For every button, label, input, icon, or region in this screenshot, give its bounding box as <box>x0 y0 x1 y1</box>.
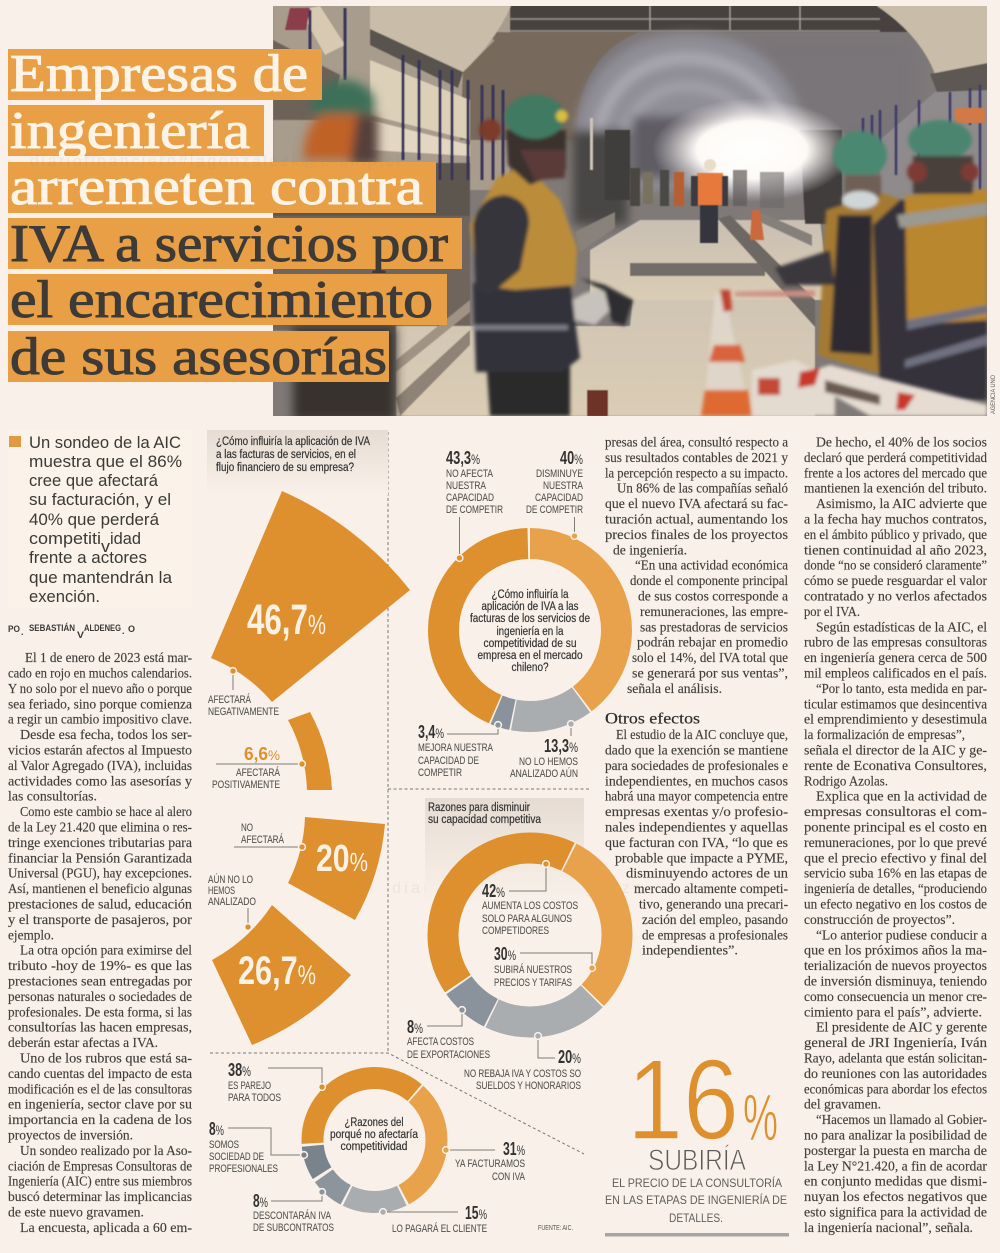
label: 31%: CON IVA <box>492 1171 525 1183</box>
article text column 4: un efecto negativo en los costos de <box>804 896 987 912</box>
article text column 4: el emprendimiento y desestimula <box>804 712 987 727</box>
article text column 1: cando cuentas del impacto de esta <box>8 1066 192 1081</box>
donut centre question <box>470 589 590 674</box>
article text column 1: buscó determinar las implicancias <box>8 1189 192 1204</box>
article text column 1: cado en rojo en muchos calendarios. <box>8 666 192 680</box>
dashed dividers <box>210 432 590 1154</box>
article text column 1: profesionales. De esta forma, si las <box>8 1004 192 1019</box>
article text column 4: rente de Econativa Consultores, <box>804 758 987 773</box>
article text column 4: “Lo anterior pudiese conducir a <box>816 927 987 942</box>
summary callout: su facturación, y el <box>29 490 171 509</box>
label: 20%: 20% <box>558 1047 581 1067</box>
article text column 4: como consecuencia un menor cre- <box>804 989 987 1004</box>
article text column 4: que en los próximos años la ma- <box>804 943 987 958</box>
label: 40%: 40% <box>560 448 583 468</box>
article text column 1: personas naturales o sociedades de <box>8 989 192 1004</box>
article text column 4: rubro de las empresas consultoras <box>804 635 987 650</box>
article text column 4: cómo se puede resguardar el valor <box>804 573 988 588</box>
label: 8% subcontratos <box>253 1189 334 1234</box>
panel: reasons to reduce competitiveness donut <box>407 798 651 1092</box>
article text column 3: independientes, en muchos casos <box>605 773 788 788</box>
sector: 26,7%: ANALIZADO <box>208 896 256 908</box>
label: 40%: NUESTRA <box>543 480 584 492</box>
label: 38%: 38% <box>228 1060 251 1080</box>
byline: PO <box>8 624 20 634</box>
article text column 4: construcción de proyectos”. <box>804 912 955 927</box>
article text column 3: podrán rebajar en promedio <box>637 635 788 650</box>
article text column 4: la formalización de empresas”, <box>804 727 965 742</box>
label: 15%: LO PAGARÁ EL CLIENTE <box>392 1222 487 1235</box>
label: 42%: AUMENTA LOS COSTOS <box>482 900 578 912</box>
donut centre question: ¿Razones del <box>344 1117 404 1129</box>
watermarks: diariofinanciero#lagonzalezk@e-chip.cl <box>30 153 400 170</box>
title line 5: el encarecimiento <box>10 271 433 329</box>
byline: V <box>77 630 84 640</box>
chart heading box <box>425 798 584 903</box>
label: 20%: SUELDOS Y HONORARIOS <box>476 1080 581 1092</box>
article text column 1: La encuesta, aplicada a 60 em- <box>20 1220 192 1235</box>
article text column 3: disminuyendo actores de un <box>626 866 788 881</box>
label: 43,3%: 43,3% <box>446 448 480 468</box>
article text column 1: ciación de Empresas Consultoras de <box>8 1158 192 1173</box>
article text column 4: remuneraciones, por lo que prevé <box>804 835 987 850</box>
panel: reasons for no effect donut <box>209 1060 573 1235</box>
article text column 4: terialización de nuevos proyectos <box>804 958 987 973</box>
byline: SEBASTIÁN <box>29 623 75 633</box>
article text column 4: de inversión disminuya, teniendo <box>804 974 987 988</box>
summary callout: exención. <box>29 587 100 606</box>
article text column 4: ponente principal es el costo en <box>804 820 987 834</box>
article text column 3: independientes”. <box>642 943 738 958</box>
donut centre question: ¿Cómo influiría la <box>492 589 569 601</box>
label: 8% subcontratos: 8% <box>253 1191 268 1211</box>
sector: 20%: NO <box>241 822 253 834</box>
article text column 4: frente a los actores del mercado que <box>804 465 987 480</box>
label: 13,3%: 13,3% <box>544 736 578 756</box>
article text column 3: de ingeniería. <box>613 542 687 557</box>
label: 8% <box>407 1007 490 1061</box>
sector: 26,7%: HEMOS <box>208 885 235 897</box>
label: 15%: 15% <box>465 1203 487 1223</box>
label: 3,4%: 3,4% <box>418 722 444 742</box>
label: 15% <box>380 1203 487 1235</box>
panel: competitiveness donut <box>418 448 616 780</box>
article text column 3: se generará por sus ventas”, <box>632 666 788 680</box>
article text column 3: probable que impacte a PYME, <box>615 850 788 865</box>
summary callout: frente a actores <box>29 548 147 567</box>
article text column 1: de este nuevo gravamen. <box>8 1204 144 1220</box>
article text column 3: tivo, generando una precari- <box>639 896 788 912</box>
summary callout: v <box>101 537 111 556</box>
article text column 3: mercado altamente competi- <box>634 881 788 896</box>
label: 13,3%: ANALIZADO AÚN <box>510 767 578 780</box>
article text column 4: a la fecha hay muchos contratos, <box>804 512 987 526</box>
article text column 1: ejemplo. <box>8 927 54 942</box>
article text column 3: sas prestadoras de servicios <box>640 619 788 634</box>
label: 30%: 30% <box>494 944 516 964</box>
label: 30%: PRECIOS Y TARIFAS <box>494 977 572 989</box>
byline: ALDENEG <box>84 623 121 633</box>
article text column 3: que facturan con IVA, “lo que es <box>605 835 788 850</box>
sector: 20%: AFECTARÁ <box>241 833 284 846</box>
subheading: Otros efectos: Otros efectos <box>605 711 700 728</box>
article text column 4: en conjunto medidas que dismi- <box>804 1174 987 1189</box>
title line 6: de sus asesorías <box>10 328 387 386</box>
label: 3,4%: MEJORA NUESTRA <box>418 742 493 754</box>
article text column 4: mantienen la exención del tributo. <box>804 481 987 496</box>
article text column 1: consultorías las hacen empresas, <box>8 1020 192 1035</box>
article text column 4: donde “no se consideró claramente” <box>804 558 987 573</box>
label: 42%: 42% <box>482 881 505 901</box>
chart heading box: su capacidad competitiva <box>428 814 542 826</box>
cones and barrier tape <box>701 290 987 416</box>
article text column 1: Y no solo por el nuevo año o porque <box>8 681 192 696</box>
label: 38% <box>228 1060 325 1104</box>
sector: 6,6%: 6,6% <box>244 744 280 764</box>
article text column 4: tienen continuidad al año 2023, <box>804 542 987 557</box>
watermarks: diariofinanciero#lagonza <box>392 880 642 897</box>
label: 40%: CAPACIDAD <box>535 492 583 504</box>
label: 40%: DISMINUYE <box>536 468 583 480</box>
chart heading box: a las facturas de servicios, en el <box>216 449 356 461</box>
title line 4: IVA a servicios por <box>10 215 448 273</box>
article text column 1: prestaciones de salud, educación <box>8 896 192 912</box>
credit: photo agency: AGENCIA UNO <box>990 375 997 414</box>
article text column 1: actividades como las asesorías y <box>8 773 192 788</box>
article text column 1: vicios estarán afectos al Impuesto <box>8 742 192 758</box>
right workers <box>775 120 987 400</box>
panel: financial flow radial chart <box>207 430 410 1045</box>
article text column 4: do reuniones con las autoridades <box>804 1066 987 1081</box>
callout description: DETALLES. <box>669 1211 723 1225</box>
article text column 3: El estudio de la AIC concluye que, <box>616 727 788 742</box>
article text column 4: Rodrigo Azolas. <box>804 773 888 788</box>
article text column 1: modificación es el de las consultoras <box>8 1081 192 1096</box>
callout: 16%: % <box>743 1080 778 1154</box>
article text column 3: habrá una mayor competencia entre <box>605 789 788 804</box>
donut segments <box>409 814 651 1056</box>
watermarks <box>30 153 642 897</box>
article text column 3: solo el 14%, del IVA total que <box>632 650 788 665</box>
article text column 1: importancia en la cadena de los <box>8 1112 192 1127</box>
article text column 3: Un 86% de las compañías señaló <box>617 481 788 496</box>
article text column 4: “Por lo tanto, esta medida en par- <box>816 681 987 696</box>
article text column 4 <box>804 434 988 1235</box>
label: 13,3% <box>510 721 578 780</box>
label: 42%: SOLO PARA ALGUNOS <box>482 913 572 925</box>
article text column 3: nales independientes y aquellas <box>605 820 788 834</box>
article text column 4: nuyan los efectos negativos que <box>804 1189 987 1204</box>
article text column 4: la ingeniería nacional”, señala. <box>804 1220 973 1235</box>
article text column 3: remuneraciones, las empre- <box>640 604 788 619</box>
label: 31% <box>443 1139 525 1183</box>
article text column 4: Explica que en la actividad de <box>816 789 987 804</box>
article text column 3: turación actual, aumentando los <box>605 512 788 526</box>
chart heading box <box>207 430 388 495</box>
label: 42% <box>482 861 578 937</box>
article text column 1: las consultorías. <box>8 789 97 804</box>
article text column 1: El 1 de enero de 2023 está mar- <box>25 650 192 665</box>
article text column 1: Como este cambio se hace al alero <box>20 804 192 819</box>
article text column 1: de la Ley 21.420 que elimina o res- <box>8 820 192 834</box>
article text column 3: señala el análisis. <box>627 681 722 696</box>
article text column 1: Un sondeo realizado por la Aso- <box>20 1143 192 1158</box>
byline: . <box>122 626 125 636</box>
byline: O <box>128 624 135 634</box>
sector: 6,6%: AFECTARÁ <box>236 766 281 779</box>
article text column 3: de sus costos corresponde a <box>638 588 788 604</box>
article text column 1: La otra opción para eximirse del <box>20 943 192 958</box>
article text column 4: general de JRI Ingeniería, Iván <box>804 1035 987 1050</box>
article text column 1: al Valor Agregado (IVA), incluidas <box>8 758 192 773</box>
article text column 1: Así, mantienen el beneficio algunas <box>8 881 192 896</box>
article text column 1: a regir un cambio impositivo clave. <box>8 712 192 727</box>
label: 40% <box>526 448 584 539</box>
article text column 3: zación del empleo, pasando <box>642 912 788 927</box>
summary callout: Un sondeo de la AIC <box>29 433 181 452</box>
label: 8% sociedad: SOCIEDAD DE <box>209 1151 264 1163</box>
label: 30%: SUBIRÁ NUESTROS <box>494 963 572 976</box>
sector: 20% <box>234 817 385 920</box>
center worker <box>470 95 633 416</box>
sector: 26,7%: 26,7% <box>238 949 316 993</box>
byline <box>8 623 135 640</box>
label: 20% <box>464 1033 581 1092</box>
title line 2: ingeniería <box>10 102 250 160</box>
label: 38%: ES PAREJO <box>228 1080 271 1092</box>
sector: 20%: 20% <box>316 838 368 880</box>
label: 31%: YA FACTURAMOS <box>455 1158 525 1170</box>
label: 43,3%: NO AFECTA <box>446 468 494 480</box>
donut centre question: competitividad de su <box>484 638 576 650</box>
article text column 4: la Ley N°21.420, a fin de acordar <box>804 1158 988 1173</box>
article text column 1: Uno de los rubros que está sa- <box>20 1050 192 1066</box>
label: 3,4% <box>418 722 501 779</box>
label: 8% sociedad: 8% <box>209 1119 224 1139</box>
label: 42%: COMPETIDORES <box>482 925 549 937</box>
donut centre question: porqué no afectaría <box>330 1129 419 1141</box>
title line 1: Empresas de <box>10 45 308 103</box>
article text column 1: tringe exenciones tributarias para <box>8 835 192 850</box>
article text column 4: en ingeniería genera cerca de 500 <box>804 650 987 665</box>
article text column 4: postergar la puesta en marcha de <box>804 1143 987 1158</box>
donut centre question: chileno? <box>512 662 548 674</box>
donut segments <box>309 1075 440 1205</box>
article text column 4: De hecho, el 40% de los socios <box>816 434 987 450</box>
summary callout: competiti <box>29 529 101 548</box>
sector: 6,6%: POSITIVAMENTE <box>212 779 280 791</box>
summary callout: 40% que perderá <box>29 510 160 529</box>
article text column 1: tributo -hoy de 19%- es que las <box>8 958 192 973</box>
callout description: EN LAS ETAPAS DE INGENIERÍA DE <box>605 1192 787 1207</box>
label: 8%: AFECTA COSTOS <box>407 1036 474 1048</box>
title <box>8 45 462 386</box>
sector: 26,7%: AÚN NO LO <box>208 873 253 886</box>
article text column 3: precios finales de los proyectos <box>605 527 788 542</box>
left blurred worker <box>293 80 396 421</box>
label: 8%: DE EXPORTACIONES <box>407 1049 490 1061</box>
article text column 3: la percepción respecto a su impacto. <box>605 465 788 480</box>
label: 38%: PARA TODOS <box>228 1092 281 1104</box>
sector: 46,7%: 46,7% <box>247 596 326 644</box>
rack panels <box>370 60 470 140</box>
article text column 1: proyectos de inversión. <box>8 1128 133 1142</box>
title line 3: arremeten contra <box>10 158 423 216</box>
source note: FUENTE: AIC. <box>538 1223 573 1232</box>
article text column 1: financiar la Pensión Garantizada <box>8 850 192 865</box>
donut centre question: facturas de los servicios de <box>470 613 590 625</box>
glow of tunnel light <box>652 98 852 202</box>
article text column 4: no para analizar la posibilidad de <box>804 1128 987 1142</box>
sector: 46,7%: AFECTARÁ <box>208 693 251 706</box>
article text column 3: “En una actividad económica <box>635 558 788 573</box>
sector: 6,6% <box>212 712 332 791</box>
article text column 3: presas del área, consultó respecto a <box>605 434 788 450</box>
article text column 4: por el IVA. <box>804 604 860 619</box>
article text column 1: deberán estar afectas a IVA. <box>8 1035 158 1050</box>
article text column 4: señala el director de la AIC y ge- <box>804 742 987 758</box>
sector: 46,7%: NEGATIVAMENTE <box>208 706 279 718</box>
article text column 4: declaró que perderá competitividad <box>804 450 987 465</box>
article text column 4: en el ámbito público y privado, que <box>804 527 987 542</box>
chart heading box: Razones para disminuir <box>428 802 530 814</box>
summary callout: cree que afectará <box>29 471 159 490</box>
article text column 4: que el precio efectivo y final del <box>804 850 987 865</box>
article text column 4: mil empleos calificados en el país. <box>804 666 987 680</box>
article text column 4: del gravamen. <box>804 1097 881 1112</box>
summary callout: que mantendrán la <box>29 568 173 587</box>
article text column 4: El presidente de AIC y gerente <box>816 1020 987 1035</box>
label: 31%: 31% <box>503 1139 525 1159</box>
callout description: EL PRECIO DE LA CONSULTORÍA <box>612 1175 782 1190</box>
donut centre question: aplicación de IVA a las <box>482 601 579 613</box>
donut segments <box>444 544 616 716</box>
article text column 3: de empresas a profesionales <box>642 927 788 942</box>
article text column 3: que el nuevo IVA afectará su fac- <box>605 496 788 511</box>
sector: 46,7% <box>208 491 410 718</box>
article text column 1: prestaciones sean entregadas por <box>8 974 193 988</box>
label: 40%: DE COMPETIR <box>526 504 583 516</box>
article text column 3: empresas exentas y/o profesio- <box>605 804 788 819</box>
article text column 1: Universal (PGU), hay excepciones. <box>8 866 192 881</box>
donut centre question: empresa en el mercado <box>478 650 582 662</box>
label: 20%: NO REBAJA IVA Y COSTOS SO <box>464 1068 581 1080</box>
article text column 1: y el transporte de pasajeros, por <box>8 912 193 927</box>
callout description <box>605 1175 787 1225</box>
donut centre question <box>330 1117 419 1153</box>
callout: 16% <box>605 1037 789 1236</box>
distant workers <box>630 159 784 243</box>
article text column 3 <box>605 434 788 958</box>
article text column 4: ticular estimamos que desincentiva <box>804 696 987 711</box>
article text column 4: empresas consultoras el com- <box>804 804 987 819</box>
label: 8% sociedad <box>209 1119 307 1175</box>
chart heading box: ¿Cómo influiría la aplicación de IVA <box>216 436 370 448</box>
label: 3,4%: CAPACIDAD DE <box>418 755 479 767</box>
article text column 4: esto significa para la actividad de <box>804 1204 987 1220</box>
article text column 3: donde el componente principal <box>630 573 788 588</box>
icon: orange square bullet <box>9 436 21 447</box>
label: 13,3%: NO LO HEMOS <box>519 756 578 768</box>
article text column 4: económicas para abordar los efectos <box>804 1081 987 1096</box>
article text column 1 <box>8 650 193 1235</box>
article text column 1: sea feriado, sino porque comienza <box>8 696 192 711</box>
donut centre question: ingeniería en la <box>496 626 564 638</box>
summary callout: muestra que el 86% <box>29 452 182 471</box>
label: 3,4%: COMPETIR <box>418 767 462 779</box>
photo: tunnel workers <box>273 0 993 421</box>
label: 8% subcontratos: DE SUBCONTRATOS <box>253 1222 334 1234</box>
article text column 3: para sociedades de profesionales e <box>605 758 788 773</box>
big number: 16 <box>627 1037 739 1164</box>
sector: 26,7% <box>208 873 351 1045</box>
big word: SUBIRÍA <box>648 1144 746 1177</box>
label: 43,3%: DE COMPETIR <box>446 504 503 516</box>
chart heading box: flujo financiero de su empresa? <box>216 462 354 474</box>
article text column 1: Desde esa fecha, todos los ser- <box>20 727 192 742</box>
article text column 4: cimiento para el país”, advierte. <box>804 1004 982 1019</box>
label: 43,3% <box>446 448 503 561</box>
byline: . <box>21 627 24 637</box>
label: 8%: 8% <box>407 1017 423 1037</box>
summary callout: idad <box>110 529 141 548</box>
label: 43,3%: CAPACIDAD <box>446 492 494 504</box>
label: 8% subcontratos: DESCONTARÁN IVA <box>253 1209 331 1222</box>
article text column 1: en ingeniería, sector clave por su <box>8 1097 192 1112</box>
article text column 4: ingeniería de detalles, “produciendo <box>804 881 987 896</box>
summary callout <box>8 430 192 608</box>
label: 43,3%: NUESTRA <box>446 480 487 492</box>
article text column 4: “Hacemos un llamado al Gobier- <box>816 1112 987 1127</box>
label: 8% sociedad: PROFESIONALES <box>209 1163 278 1175</box>
article text column 1: Ingeniería (AIC) entre sus miembros <box>8 1174 192 1189</box>
article text column 4: contratado y no verlos afectados <box>804 588 987 604</box>
article text column 4: Asimismo, la AIC advierte que <box>816 496 987 511</box>
article text column 3: sus resultados contables de 2021 y <box>605 450 788 465</box>
article text column 4: servicio suba 16% en las etapas de <box>804 866 987 881</box>
label: 8% sociedad: SOMOS <box>209 1139 239 1151</box>
donut centre question: competitividad <box>340 1141 408 1153</box>
article text column 4: Según estadísticas de la AIC, el <box>816 619 987 634</box>
label: 30% <box>494 944 595 989</box>
article text column 3: dado que la exención se mantiene <box>605 742 788 758</box>
article text column 4: Rayo, adelanta que están solicitan- <box>804 1050 987 1066</box>
